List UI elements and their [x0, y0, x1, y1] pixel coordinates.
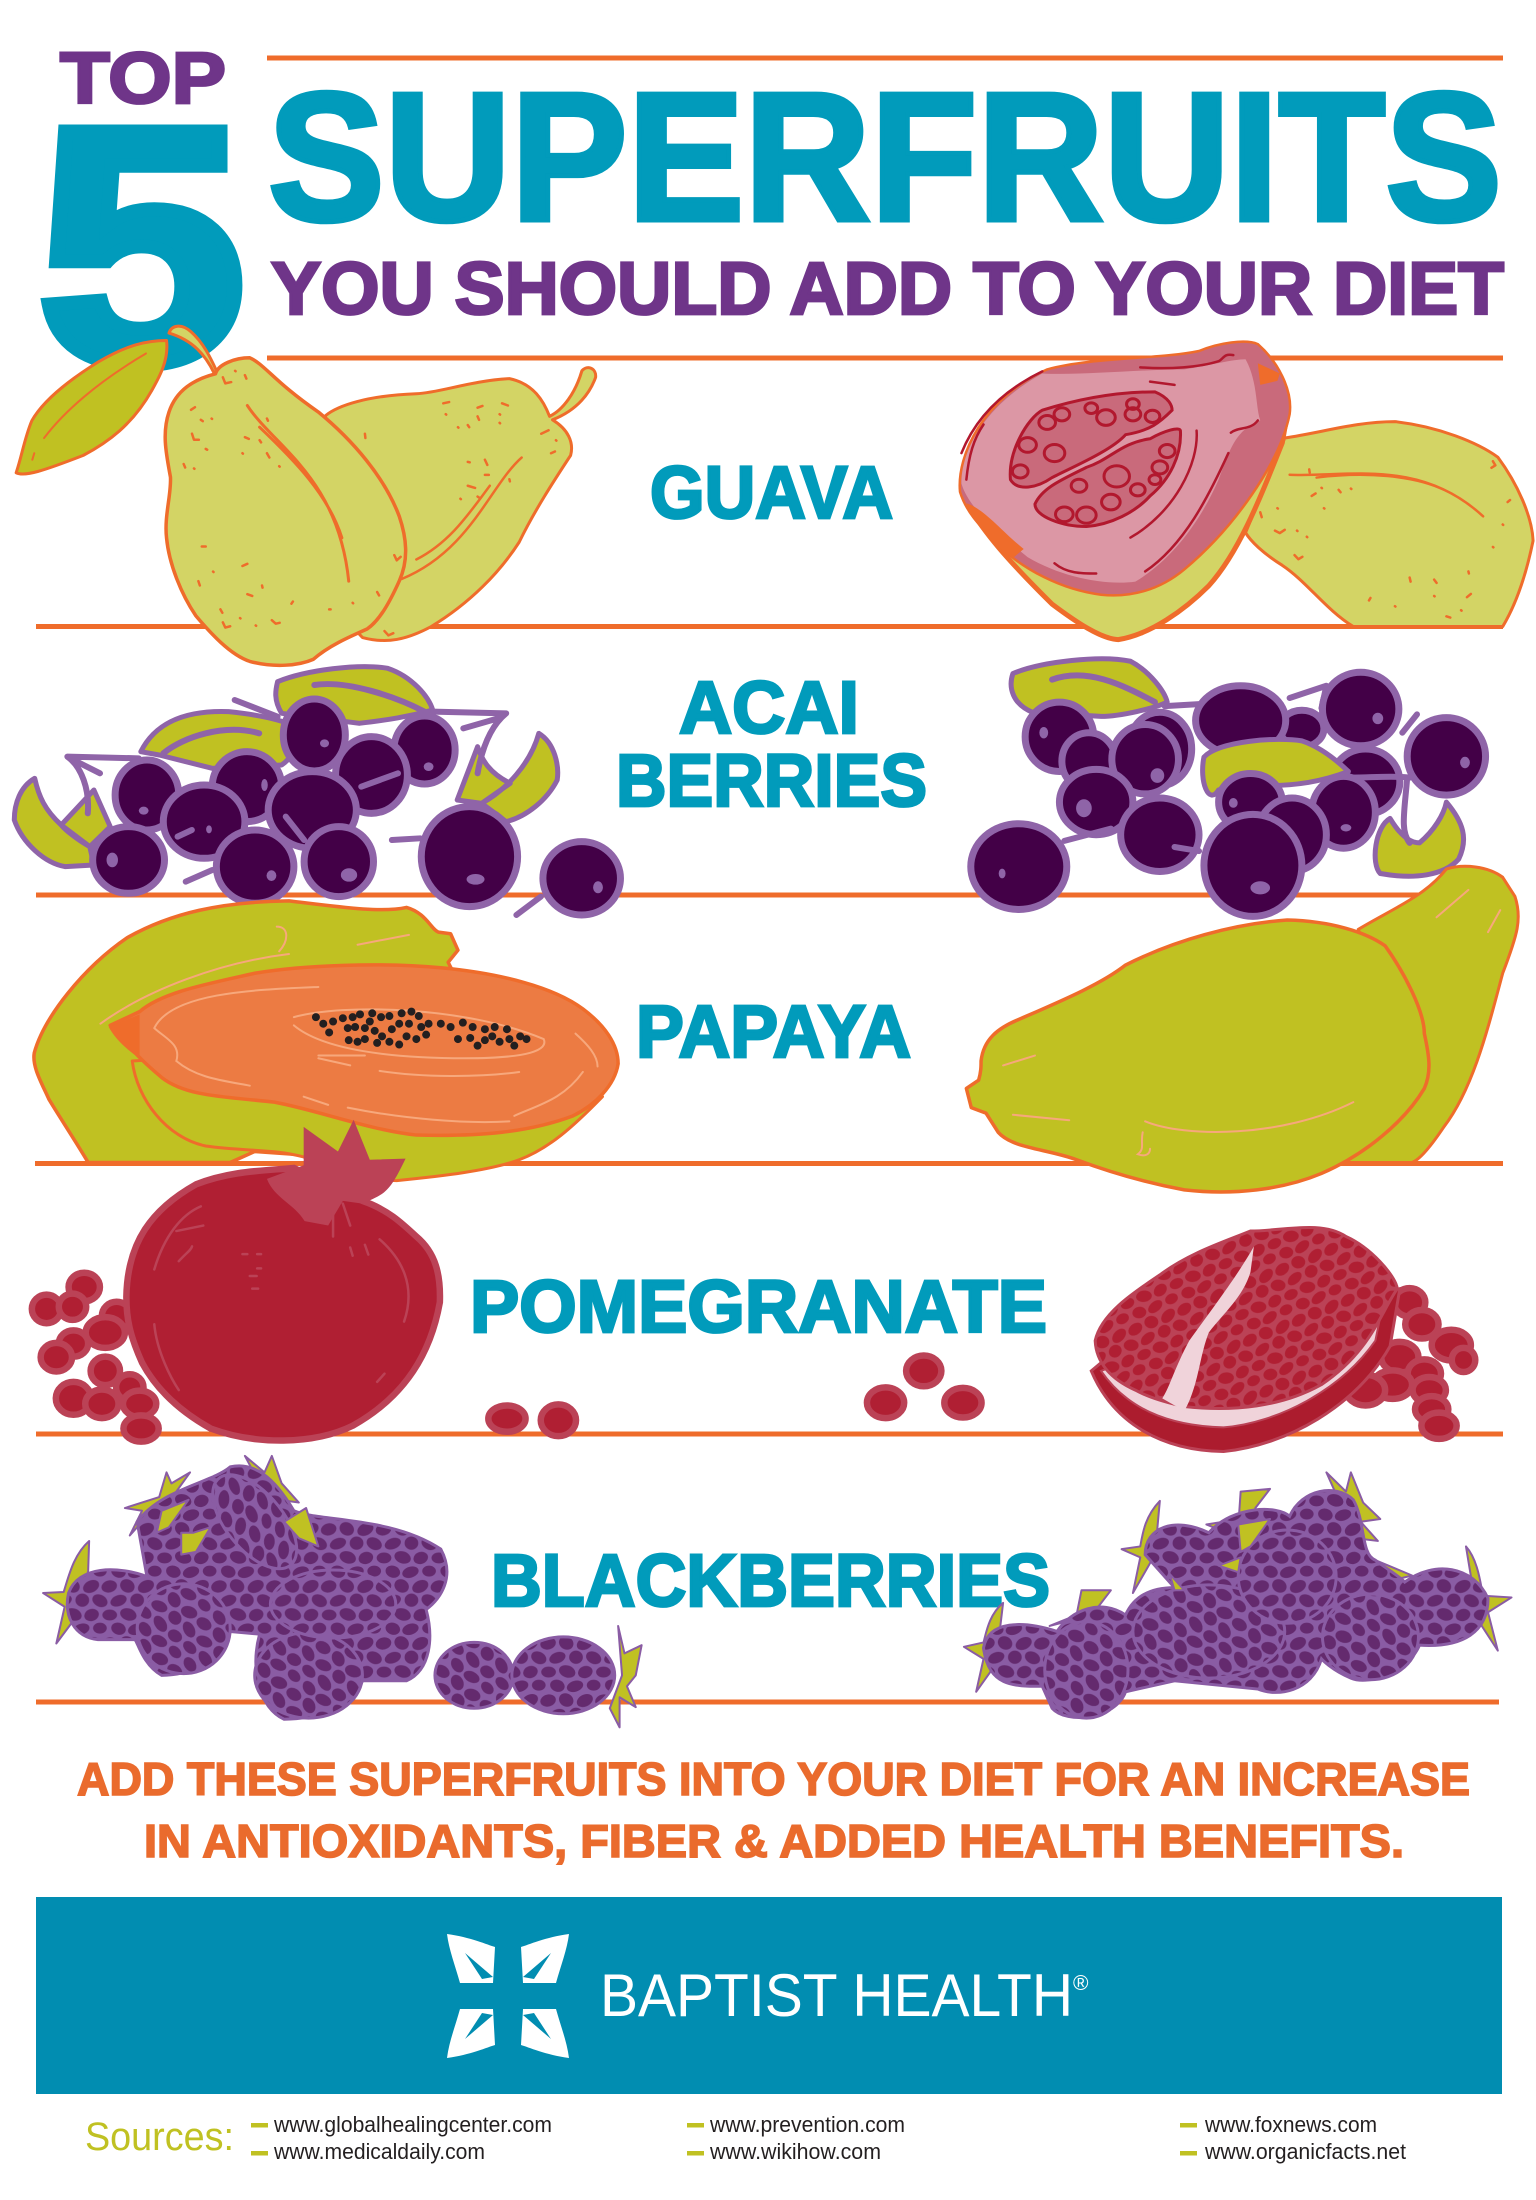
title: superfruits: SUPERFRUITS [268, 54, 1502, 259]
title: big numeral 5: 5 [38, 59, 245, 433]
acai small stems and highlights [107, 739, 603, 915]
blackberries left pile [43, 1456, 642, 1727]
back papaya [34, 901, 490, 1162]
pomegranate left: whole fruit and seeds [32, 1120, 576, 1442]
papaya flesh highlights [100, 927, 598, 1122]
label: guava: GUAVA [650, 451, 893, 534]
pomegranate highlights [154, 1204, 409, 1390]
papaya left: halved fruit [34, 901, 618, 1181]
seed mass [1095, 1227, 1397, 1409]
pomegranate body [126, 1168, 440, 1441]
pear stem [169, 326, 216, 373]
flesh edge lines [961, 355, 1258, 573]
blackberries right pile [964, 1472, 1512, 1718]
label: acai berries: ACAI [679, 666, 859, 749]
pith split [1162, 1246, 1254, 1411]
label: blackberries: BLACKBERRIES [491, 1539, 1050, 1622]
papaya right: whole fruits [966, 866, 1518, 1192]
lower papaya half [132, 1045, 602, 1181]
back papaya [1341, 866, 1518, 1162]
source links: www.foxnews.com [1204, 2112, 1377, 2137]
source links [273, 2112, 1406, 2164]
back pear crease [402, 458, 522, 579]
acai leaves [1011, 659, 1464, 876]
label: papaya: PAPAYA [636, 990, 911, 1073]
acai stems [1052, 675, 1417, 733]
whole half [1246, 422, 1533, 627]
sources [85, 2112, 1406, 2164]
closing statement: IN ANTIOXIDANTS, FIBER & ADDED HEALTH BENEFITS. [144, 1815, 1404, 1867]
pomegranate seeds pile [32, 1273, 159, 1442]
rind [1091, 1289, 1400, 1452]
source links: www.prevention.com [709, 2112, 905, 2137]
acai small stems and highlights [999, 713, 1470, 894]
guava illustration: cut fruit right [960, 342, 1533, 640]
acai berries right cluster [971, 659, 1486, 916]
source links: www.organicfacts.net [1204, 2139, 1406, 2164]
pomegranate right: cut fruit [867, 1227, 1475, 1452]
acai leaves [14, 667, 558, 867]
berry overlaps [137, 1459, 615, 1718]
berry mass [67, 1466, 447, 1719]
acai stems [67, 684, 506, 813]
logo wordmark: BAPTIST HEALTH [600, 1962, 1073, 2029]
registered mark: ® [1073, 1972, 1089, 1995]
pear crease [247, 406, 349, 581]
papaya seeds [316, 1012, 527, 1046]
papaya tip [109, 1014, 140, 1058]
guava illustration: whole fruits left [16, 326, 596, 665]
berry leaves front [1170, 1519, 1270, 1590]
label: acai berries: BERRIES [616, 739, 927, 822]
sources label: Sources: [85, 2115, 234, 2159]
berry leaves front [157, 1500, 642, 1727]
subtitle: YOU SHOULD ADD TO YOUR DIET [271, 247, 1504, 330]
label: acai berries [616, 666, 927, 822]
leaf vein [32, 353, 146, 460]
leaf [16, 340, 167, 474]
acai berries [93, 699, 620, 915]
seed lobes [1010, 392, 1181, 527]
seeds behind [1346, 1288, 1475, 1439]
orange patches [966, 363, 1280, 558]
loose seeds [867, 1356, 982, 1418]
acai berries left cluster [14, 667, 620, 915]
source links: www.medicaldaily.com [273, 2139, 485, 2164]
guava seeds [1012, 399, 1175, 523]
icon: baptist health logo [447, 1934, 569, 2058]
middle leaf [1203, 739, 1348, 795]
panel: baptist health banner [36, 1897, 1502, 2094]
divider rules [35, 56, 1503, 1704]
back pear [294, 368, 596, 641]
source links: www.globalhealingcenter.com [273, 2112, 552, 2137]
acai berries [1025, 672, 1486, 814]
flesh rim [960, 342, 1290, 595]
rind [964, 414, 1287, 640]
white pith [1101, 1289, 1386, 1427]
title: top: TOP [60, 39, 226, 119]
papaya highlights [1003, 890, 1500, 1155]
closing statement [77, 1753, 1470, 1867]
berry overlaps [1045, 1530, 1418, 1718]
pomegranate crown [267, 1120, 406, 1226]
acai berries front [971, 769, 1375, 916]
front papaya [966, 920, 1429, 1192]
loose seeds [488, 1404, 576, 1436]
crease and speckles [1260, 461, 1510, 618]
berry leaves [43, 1456, 333, 1644]
closing statement: ADD THESE SUPERFRUITS INTO YOUR DIET FOR AN INCREASE [77, 1753, 1470, 1805]
pear speckles [184, 371, 556, 635]
berry mass [984, 1491, 1488, 1717]
source bullets [251, 2123, 1197, 2156]
source links: www.wikihow.com [709, 2139, 881, 2164]
label: pomegranate: POMEGRANATE [470, 1265, 1047, 1348]
flesh [961, 359, 1260, 583]
front pear [165, 358, 406, 665]
berry leaves [964, 1472, 1512, 1692]
papaya flesh [110, 965, 618, 1135]
